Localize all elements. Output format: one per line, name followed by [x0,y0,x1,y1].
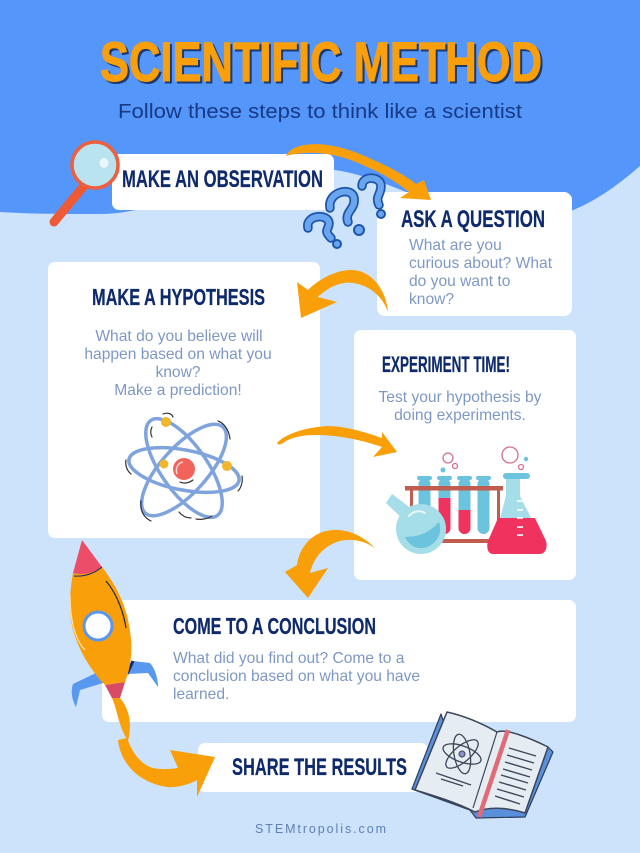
text: ask a question body: curious about? What [409,255,553,272]
arrow: question to hypothesis [297,270,388,318]
icon: atom [125,407,243,529]
panel: experiment time [354,330,576,580]
heading: ask a question: ASK A QUESTION [401,206,545,233]
arrow: rocket to share [118,738,215,797]
blue header wave [0,0,640,222]
text: experiment body: doing experiments. [394,407,526,424]
icon: open book [412,712,553,818]
panel: ask a question [377,192,572,316]
text: conclusion body: What did you find out? Come to a [173,650,405,667]
arrow: observation to question [286,144,431,200]
panel: make a hypothesis [48,262,320,538]
text: hypothesis body: know? [155,364,201,381]
text: hypothesis body: What do you believe will [95,328,263,345]
icon: magnifying glass [54,142,118,222]
icon: rocket [70,540,158,741]
text: hypothesis body: happen based on what you [84,346,272,363]
heading: come to a conclusion: COME TO A CONCLUSION [173,613,376,639]
panel: make an observation [112,154,334,210]
text: hypothesis body: Make a prediction! [114,382,242,399]
heading: experiment time: EXPERIMENT TIME! [382,352,510,377]
text: ask a question body: do you want to [409,273,511,290]
subtitle: Follow these steps to think like a scientist [118,101,522,123]
arrow: hypothesis to experiment [277,426,397,457]
text: conclusion body: learned. [173,686,229,703]
icon: question marks [308,178,385,248]
heading: share the results: SHARE THE RESULTS [232,754,407,781]
panel: come to a conclusion [102,600,576,722]
text: ask a question body: know? [409,291,454,308]
footer: STEMtropolis.com [255,822,386,836]
heading: make a hypothesis: MAKE A HYPOTHESIS [92,284,265,310]
text: experiment body: Test your hypothesis by [379,389,542,406]
panel: share the results [198,743,428,792]
icon: lab glassware [386,447,547,554]
heading: make an observation: MAKE AN OBSERVATION [122,166,323,193]
text: conclusion body: conclusion based on what you have [173,668,420,685]
text: ask a question body: What are you [409,237,502,254]
arrow: experiment to conclusion [285,530,375,598]
